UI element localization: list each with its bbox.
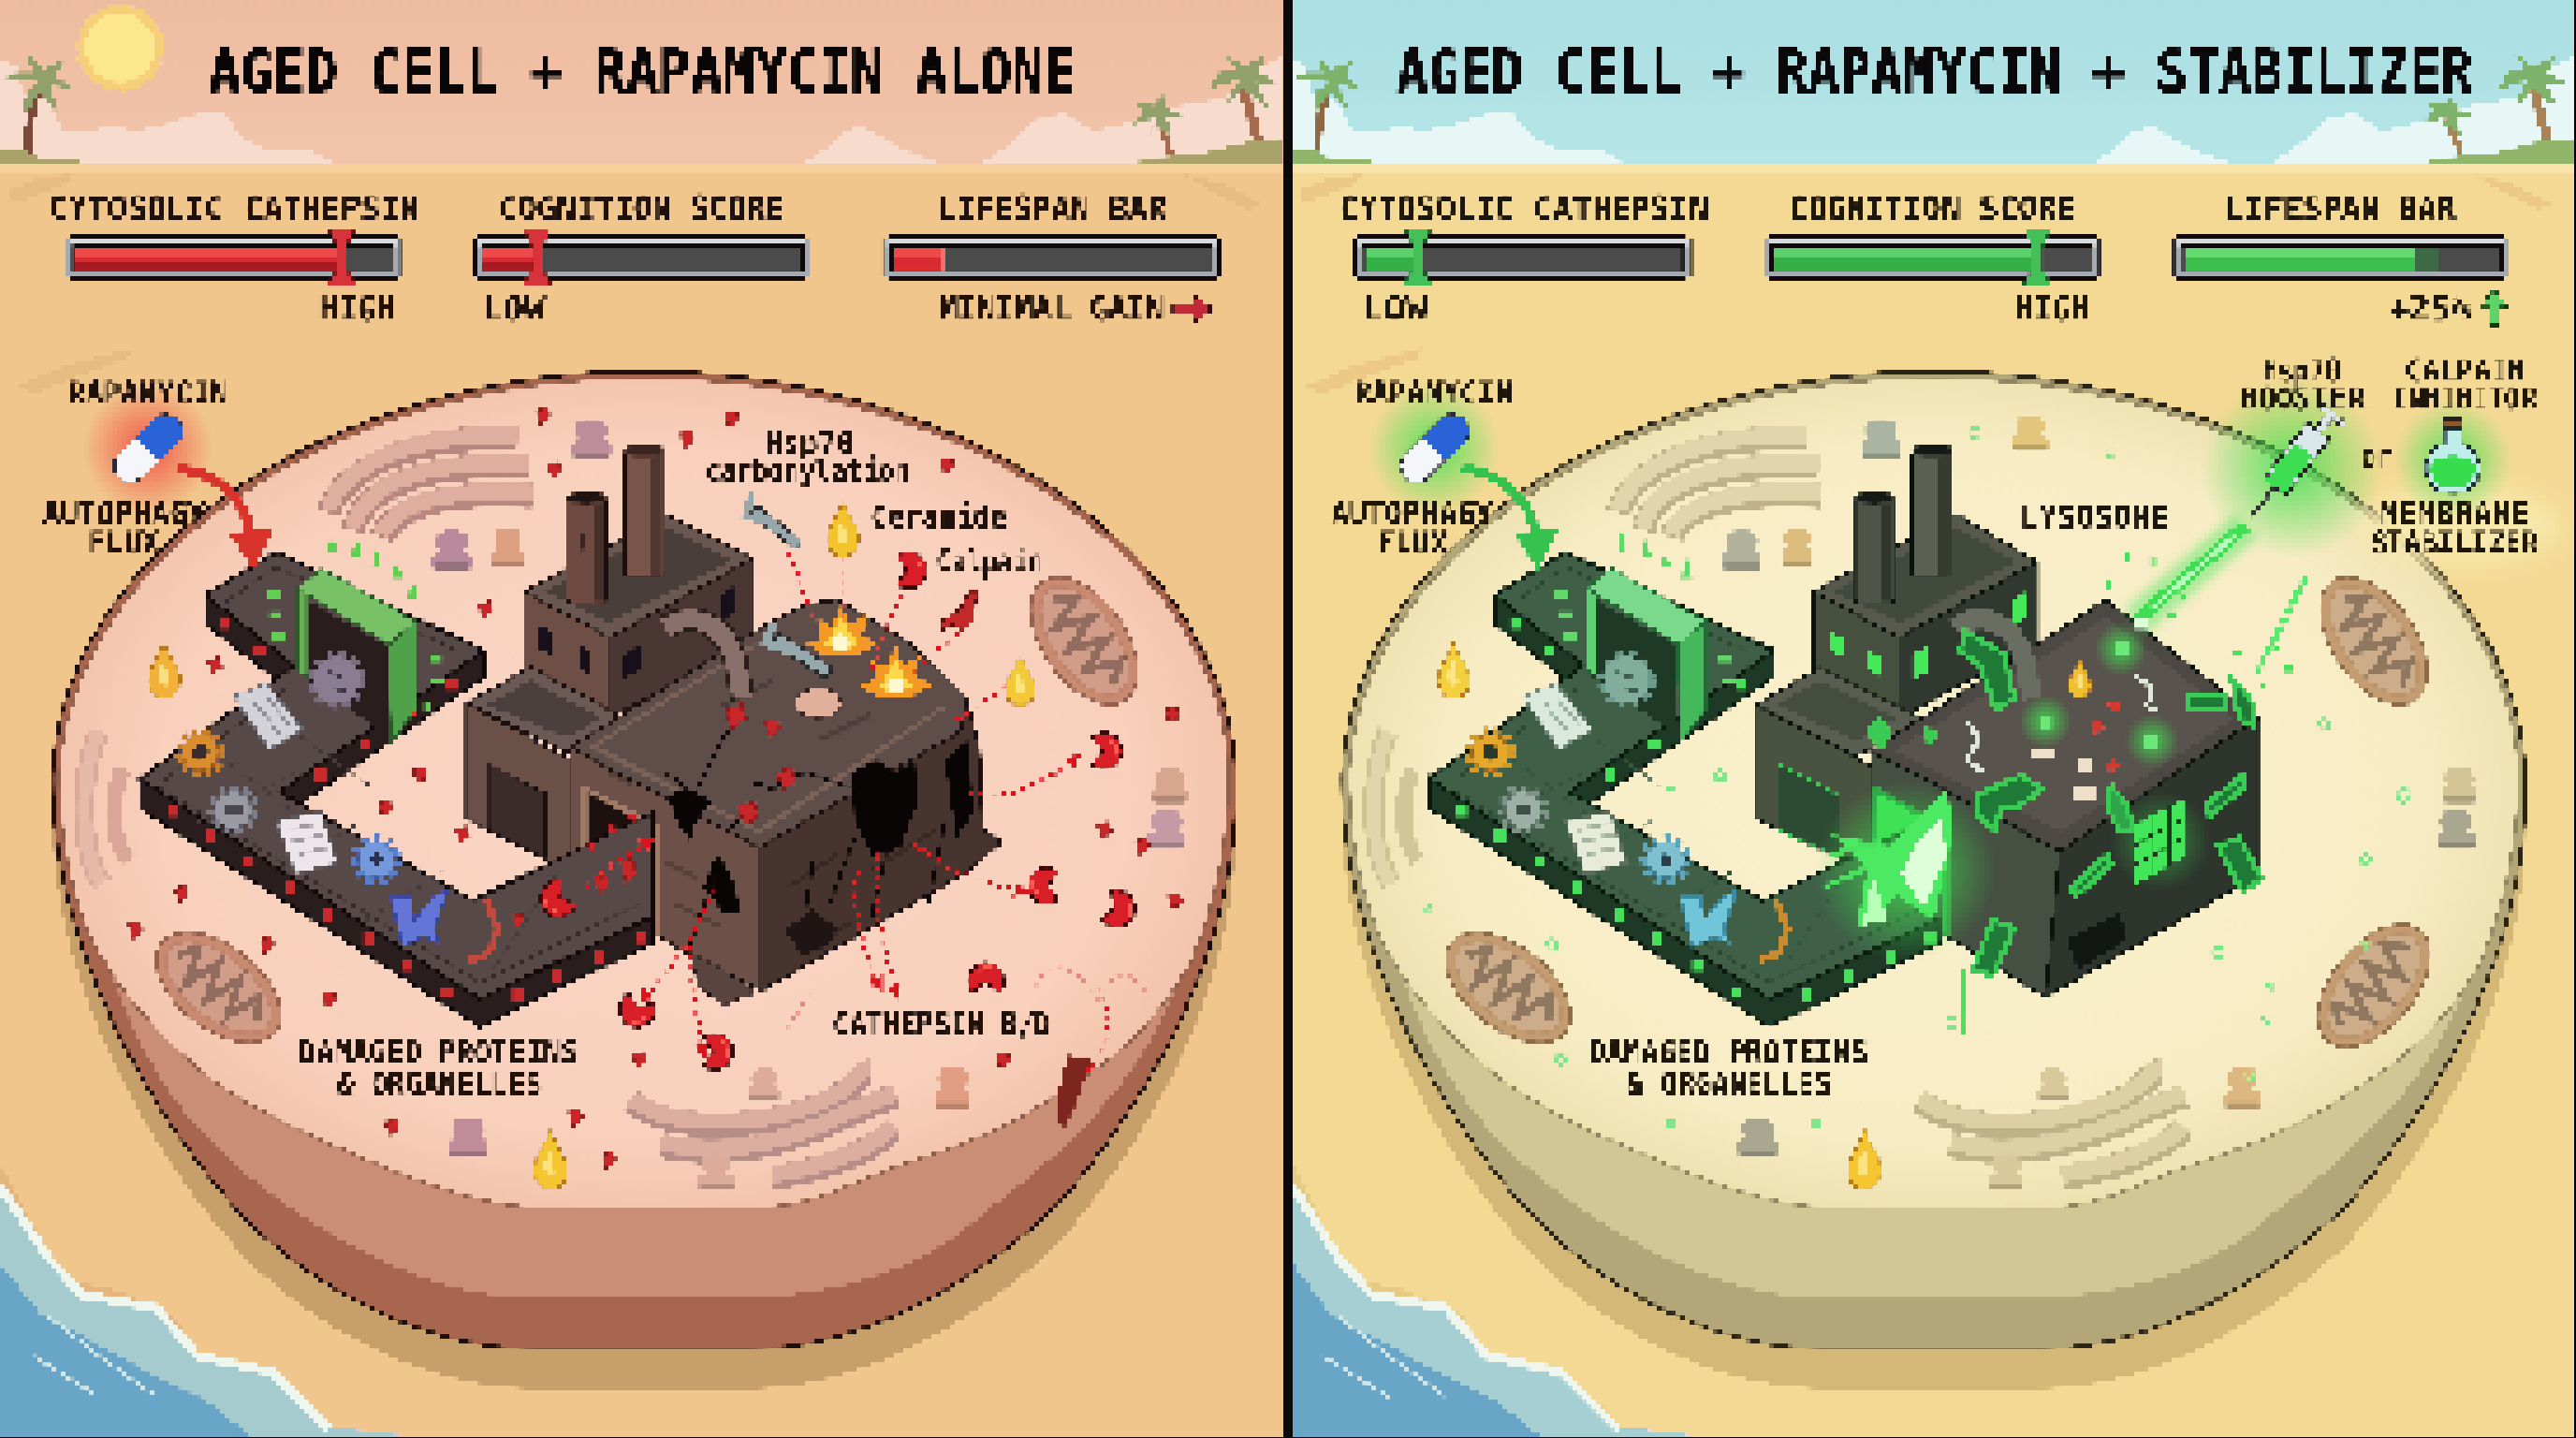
escaping enzyme arrows bbox=[578, 759, 1075, 1051]
mitochondria bbox=[1426, 558, 2452, 1067]
icon: blue gear bbox=[1645, 838, 1687, 881]
icon: paper sheet bbox=[1566, 812, 1627, 874]
icon: paper bbox=[1523, 683, 1592, 749]
label: hsp70 carbonylation: Hsp70 bbox=[764, 424, 855, 461]
small palm tree bbox=[1134, 95, 1183, 161]
sand marks bbox=[1298, 174, 2552, 394]
autophagy flux arrow bbox=[176, 468, 274, 570]
green sparkles bbox=[1426, 427, 2410, 1127]
lysosome factory, repaired bbox=[1368, 378, 2561, 1035]
vent grate bbox=[2067, 912, 2128, 970]
icon: orange ring bbox=[179, 731, 222, 774]
membrane gap patch behind label bbox=[2358, 487, 2561, 565]
label: hsp70 booster: BOOSTER bbox=[2239, 380, 2366, 417]
icon: blue gear bbox=[355, 838, 398, 881]
right palm tree bbox=[2497, 52, 2571, 159]
title: AGED CELL + RAPAMYCIN ALONE bbox=[209, 37, 1076, 106]
wall texture bbox=[607, 682, 936, 953]
lysosome door glowing bbox=[1875, 788, 1947, 933]
rapamycin pill glow bbox=[1368, 383, 1500, 514]
sand background bbox=[1290, 165, 2576, 1438]
roof glowing patches bbox=[2019, 623, 2178, 768]
label: membrane stabilizer: MEMBRANE bbox=[2378, 495, 2530, 532]
metric: cognition score bbox=[473, 188, 812, 329]
metric: cytosolic cathepsin bbox=[1339, 188, 1708, 329]
label: rapamycin: RAPAMYCIN bbox=[1354, 375, 1513, 412]
lipid droplets bbox=[1438, 643, 1881, 1189]
right panel text bbox=[1331, 37, 2539, 1102]
label: autophagy flux: AUTOPHAGY bbox=[43, 495, 205, 532]
left palm tree bbox=[4, 52, 72, 156]
label: damaged proteins and organelles: DAMAGED PROTEINS bbox=[1588, 1034, 1868, 1071]
mitochondria bbox=[137, 558, 1160, 1064]
metric: cytosolic cathepsin: LOW bbox=[1362, 290, 1428, 329]
metric: cognition score: COGNITION SCORE bbox=[1789, 188, 2075, 228]
ribosome blobs bbox=[1721, 416, 2477, 1189]
label: rapamycin: RAPAMYCIN bbox=[67, 375, 228, 412]
icon: misfolded blue protein bbox=[391, 890, 446, 946]
icon: damaged paper bbox=[233, 683, 302, 749]
label: autophagy flux bbox=[43, 495, 205, 561]
metric: cognition score bbox=[1763, 188, 2101, 329]
panel divider bbox=[1283, 0, 1293, 1438]
windows glowing bbox=[2111, 792, 2210, 890]
label: calpain inhibitor: CALPAIN bbox=[2405, 352, 2525, 389]
main lysosome block bbox=[1871, 600, 2258, 997]
metric: lifespan bar: LIFESPAN BAR bbox=[936, 188, 1167, 228]
items on conveyor bbox=[179, 655, 637, 961]
cell disc: shadow, wall and cytoplasm bbox=[52, 372, 1236, 1388]
faint dotted fragments bbox=[781, 968, 1150, 1038]
main lysosome block bbox=[570, 600, 1003, 1005]
icon: hsp70 syringe bbox=[2238, 403, 2346, 527]
hsp70 beam bbox=[2136, 526, 2246, 621]
rubble bbox=[690, 953, 755, 1005]
label: hsp70 carbonylation bbox=[705, 424, 910, 489]
label: hsp70 booster bbox=[2239, 352, 2366, 417]
label: damaged proteins and organelles bbox=[1588, 1034, 1868, 1102]
label: calpain inhibitor bbox=[2392, 352, 2538, 417]
shrubs bbox=[1293, 138, 2576, 165]
roof debris bbox=[1924, 660, 2157, 799]
icon: teal gear bbox=[1602, 655, 1651, 705]
label: hsp70 booster: Hsp70 bbox=[2262, 352, 2341, 389]
left panel artwork bbox=[0, 0, 1284, 1438]
label: ceramide: Ceramide bbox=[871, 498, 1007, 535]
label: autophagy flux: FLUX bbox=[1377, 524, 1447, 561]
green scanner gate bbox=[1556, 531, 1734, 742]
right palm tree bbox=[1208, 52, 1281, 159]
golgi top bbox=[1618, 435, 1822, 537]
label: lysosome: LYSOSOME bbox=[2021, 498, 2169, 535]
metric: lifespan bar: MINIMAL GAIN bbox=[940, 290, 1164, 329]
icon: up arrow bbox=[2481, 289, 2507, 326]
icon: explosions bbox=[807, 605, 931, 698]
label: damaged proteins and organelles: DAMAGED PROTEINS bbox=[299, 1034, 578, 1071]
label: membrane stabilizer bbox=[2371, 495, 2539, 561]
golgi bottom bbox=[1921, 1068, 2185, 1178]
metric: cytosolic cathepsin: HIGH bbox=[318, 290, 394, 329]
green repair clamps bbox=[1868, 631, 2262, 976]
label: membrane stabilizer: STABILIZER bbox=[2371, 524, 2539, 561]
label: calpain inhibitor: INHIBITOR bbox=[2392, 380, 2538, 417]
calpain and cathepsin enzymes bbox=[614, 552, 1140, 1070]
beam sparks bbox=[2108, 550, 2291, 690]
green scanner gate bbox=[266, 531, 446, 742]
icon: grey gear bbox=[212, 788, 255, 831]
icon: wrench label bbox=[746, 496, 795, 542]
autophagy flux arrow bbox=[1462, 468, 1559, 570]
lysosome factory, damaged bbox=[82, 383, 1150, 1134]
metric: cytosolic cathepsin: CYTOSOLIC CATHEPSIN bbox=[50, 188, 419, 228]
label: autophagy flux: FLUX bbox=[89, 524, 159, 561]
label: cathepsin b/d: CATHEPSIN B/D bbox=[833, 1006, 1051, 1043]
icon: red squiggle protein bbox=[468, 901, 498, 961]
metric: lifespan bar bbox=[882, 188, 1221, 329]
clouds bbox=[0, 56, 1283, 165]
icon: purple gear bbox=[312, 655, 361, 705]
icon: wrench on roof bbox=[766, 624, 825, 670]
icon: rapamycin capsule bbox=[1394, 408, 1475, 490]
conveyor belt bbox=[139, 552, 652, 1027]
conveyor belt bbox=[1429, 552, 1942, 1027]
ribosome blobs bbox=[432, 419, 1188, 1189]
green burst from door bbox=[1815, 781, 1996, 1035]
metric: lifespan bar bbox=[2172, 188, 2510, 329]
left panel text bbox=[43, 37, 1221, 1102]
connecting pipe bbox=[666, 619, 742, 698]
metric: lifespan bar: LIFESPAN BAR bbox=[2226, 188, 2457, 228]
right panel artwork bbox=[1290, 0, 2576, 1438]
sea bbox=[1293, 1164, 1725, 1438]
low annex block bbox=[466, 668, 624, 877]
left palm tree bbox=[1293, 52, 1362, 156]
lipid droplets bbox=[149, 502, 1034, 1189]
metric: cognition score: LOW bbox=[481, 290, 547, 329]
icon: rapamycin capsule bbox=[108, 408, 188, 490]
sky background bbox=[0, 0, 1284, 166]
label: calpain: Calpain bbox=[936, 543, 1043, 580]
cracks and holes bbox=[667, 740, 973, 956]
label: autophagy flux: AUTOPHAGY bbox=[1331, 495, 1493, 532]
lysosome door bbox=[585, 788, 657, 933]
icon: blue protein bbox=[1680, 890, 1736, 946]
red protein fragments bbox=[128, 407, 1183, 1168]
golgi bottom bbox=[631, 1068, 896, 1178]
icon: orange squiggle protein bbox=[1758, 901, 1788, 961]
label: or: or bbox=[2361, 437, 2392, 474]
metric: cytosolic cathepsin: CYTOSOLIC CATHEPSIN bbox=[1339, 188, 1708, 228]
roof debris bbox=[725, 688, 842, 825]
sun bbox=[77, 5, 163, 91]
arrow to membrane breach bbox=[1088, 986, 1108, 1068]
label: damaged proteins and organelles: & ORGANELLES bbox=[1627, 1065, 1832, 1102]
booster and flask glow bbox=[2202, 378, 2512, 559]
panel: aged cell + rapamycin + stabilizer bbox=[1283, 0, 2576, 1438]
cell disc: shadow, wall and cytoplasm bbox=[1342, 372, 2525, 1388]
icon: orange ring bbox=[1469, 731, 1512, 774]
label: autophagy flux bbox=[1331, 495, 1493, 561]
back tower bbox=[1814, 514, 2037, 718]
back tower bbox=[524, 514, 753, 718]
clouds bbox=[1293, 56, 2576, 165]
metric: cognition score: COGNITION SCORE bbox=[500, 188, 785, 228]
sand marks bbox=[8, 174, 1262, 394]
label: damaged proteins and organelles bbox=[299, 1034, 578, 1102]
beam glow bbox=[2136, 526, 2246, 621]
membrane breach bbox=[1057, 1055, 1090, 1134]
golgi left bbox=[1373, 731, 1418, 884]
small palm tree bbox=[2423, 95, 2472, 161]
chimneys bbox=[1855, 444, 1952, 603]
chimneys bbox=[567, 444, 664, 603]
icon: red fragments on belt bbox=[512, 814, 637, 927]
shrubs bbox=[0, 138, 1283, 165]
label: hsp70 carbonylation: carbonylation bbox=[705, 452, 910, 489]
title: AGED CELL + RAPAMYCIN + STABILIZER bbox=[1397, 37, 2473, 106]
metric: cytosolic cathepsin bbox=[50, 188, 419, 329]
golgi left bbox=[84, 731, 128, 884]
metric: lifespan bar: +25% bbox=[2389, 290, 2471, 329]
items on conveyor bbox=[1469, 655, 1788, 961]
label: damaged proteins and organelles: & ORGANELLES bbox=[337, 1065, 542, 1102]
sea bbox=[0, 1164, 435, 1438]
icon: grey gear bbox=[1501, 788, 1544, 831]
sand background bbox=[0, 165, 1284, 1438]
icon: sideways arrow bbox=[1173, 296, 1212, 322]
golgi top bbox=[329, 435, 533, 537]
rapamycin pill glow bbox=[82, 383, 213, 514]
icon: membrane stabilizer flask bbox=[2425, 419, 2480, 493]
metric: cognition score: HIGH bbox=[2014, 290, 2089, 329]
connecting pipe bbox=[1955, 619, 2032, 698]
icon: paper sheet bbox=[276, 812, 337, 874]
sky background bbox=[1290, 0, 2576, 166]
low annex block bbox=[1756, 668, 1922, 877]
label connector dots bbox=[788, 550, 1005, 723]
secondary beam bbox=[2258, 575, 2306, 672]
